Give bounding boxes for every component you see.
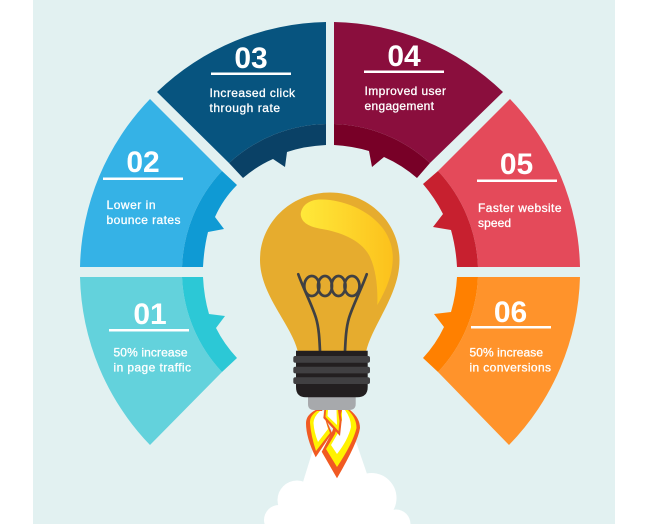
text 03: Increased click <box>210 86 296 100</box>
text 01: in page traffic <box>114 360 191 374</box>
left flame <box>306 410 332 457</box>
text 01 <box>114 346 191 374</box>
number 01: 01 <box>133 298 167 331</box>
filament <box>298 274 367 351</box>
number 04: 04 <box>387 40 421 73</box>
number 05: 05 <box>500 148 533 181</box>
text 06: 50% increase <box>470 346 543 360</box>
bulb glass <box>260 192 400 352</box>
text 04: engagement <box>364 99 435 113</box>
small top flame <box>323 410 342 436</box>
text 05 <box>478 201 562 230</box>
text 02: Lower in <box>106 198 156 212</box>
segment 03: click through rate <box>157 22 326 178</box>
text 02 <box>106 198 180 227</box>
text 05: speed <box>478 216 511 230</box>
segment 04: user engagement <box>334 22 503 178</box>
rocket exhaust and cloud <box>264 430 410 524</box>
glass highlight <box>301 199 393 305</box>
text 06: in conversions <box>470 360 551 374</box>
number 02: 02 <box>126 146 160 179</box>
gray tab <box>308 396 356 410</box>
segment 02: bounce rates <box>80 99 237 267</box>
text 02: bounce rates <box>106 213 180 227</box>
text 06 <box>470 346 551 374</box>
text 05: Faster website <box>478 201 562 215</box>
text 04: Improved user <box>364 84 446 98</box>
number 06: 06 <box>494 296 527 329</box>
segment 01: page traffic <box>80 277 237 445</box>
screw base <box>296 351 368 397</box>
light bulb <box>260 192 400 410</box>
text 03 <box>210 86 296 115</box>
text 01: 50% increase <box>114 346 188 360</box>
text 03: through rate <box>210 101 280 115</box>
segment 06: conversions <box>423 277 580 445</box>
big flame <box>322 410 360 478</box>
flames <box>306 410 360 478</box>
number 03: 03 <box>234 42 268 75</box>
text 04 <box>364 84 446 113</box>
segment 05: website speed <box>423 99 580 267</box>
